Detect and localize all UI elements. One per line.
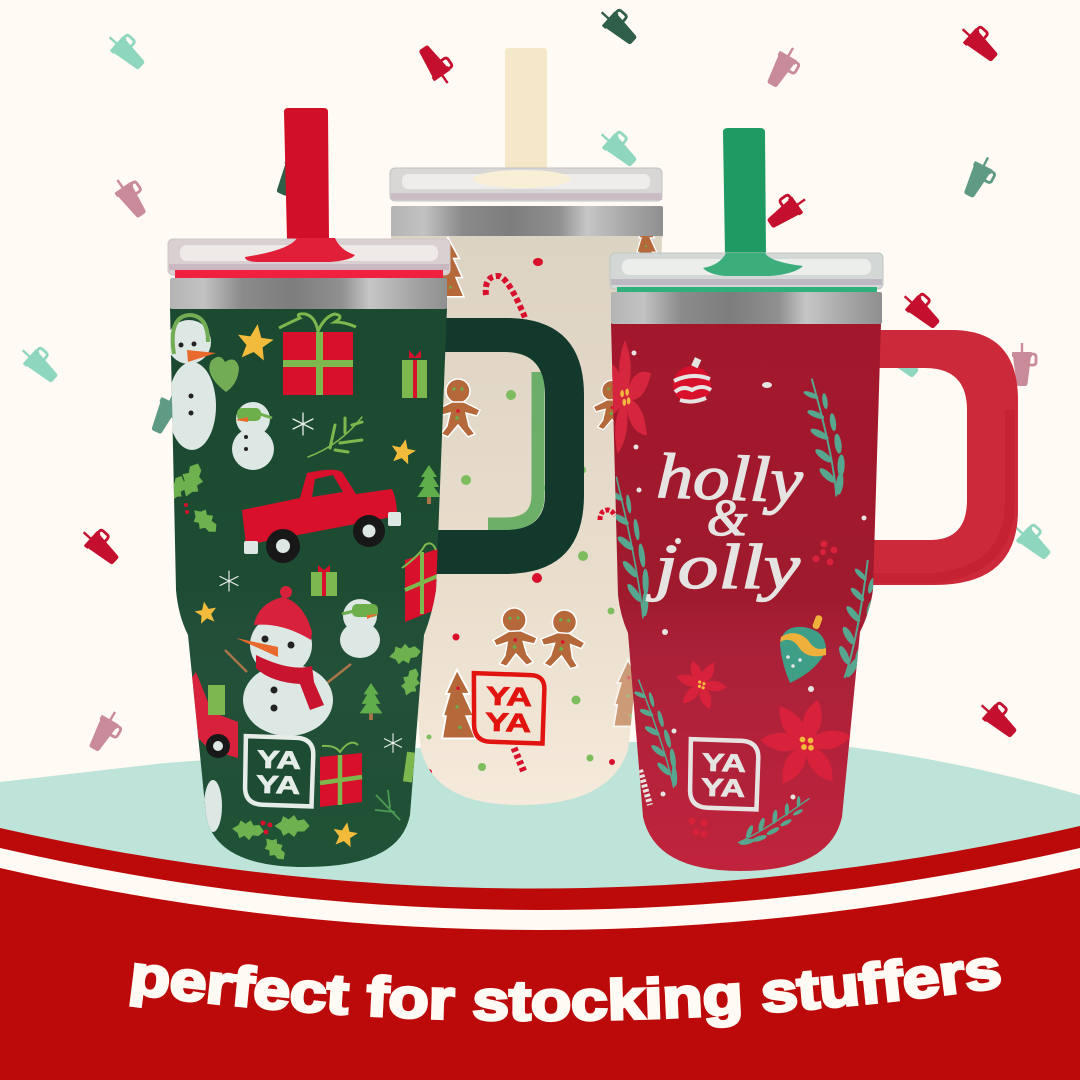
lower berries [688,818,708,838]
green YAYA logo [244,736,314,806]
large red gift [279,314,356,395]
big snowman with hat [225,586,351,736]
tumbler: green snowman [165,108,450,867]
green steel collar [170,278,447,309]
green YAYA logo: YA [257,746,302,775]
dark green handle [435,318,584,574]
holly & jolly script: jolly [646,531,801,602]
cream tumbler decals [426,222,658,775]
holly berries [812,540,838,566]
red steel collar [611,292,882,324]
small green gift [402,350,427,398]
cream steel collar [391,206,663,237]
green ornament [780,614,826,683]
cream YAYA logo [472,673,545,744]
snowman and christmas decals [165,314,441,865]
red handle [870,330,1018,585]
large poinsettia top [612,340,651,454]
green YAYA logo: YA [256,771,301,800]
red curved band with cream stripe [0,826,1080,1080]
curved caption: perfect for stocking stuffers [129,957,1002,1028]
goggle snowman small [340,599,380,658]
red YAYA logo: YA [702,749,747,778]
red YAYA logo [689,739,759,809]
scattered mini tumbler icons [16,2,1057,756]
earmuff snowman [167,315,239,450]
pine twig [308,417,362,457]
striped ornament [673,357,711,404]
cream straw [505,48,547,172]
green straw [723,128,766,255]
red pickup truck [242,470,401,563]
red YAYA logo: YA [701,774,746,803]
side gift [402,543,440,622]
tumbler: red holly and jolly [596,128,1018,871]
goggle snowman [232,402,274,470]
gift by logo [320,743,362,807]
truck wrap left [190,672,238,758]
cream body [391,236,662,805]
red tumbler lid [610,253,883,293]
cream YAYA logo: YA [485,707,532,738]
mint table surface [0,742,1080,920]
red tumbler body [611,323,881,871]
tumbler: cream gingerbread [390,48,663,805]
red straw [284,108,329,240]
cream lid [390,168,662,201]
yellow star [238,324,274,360]
green tumbler lid [168,238,450,278]
small gift [311,565,337,596]
holly & jolly script [646,440,805,602]
cream YAYA logo: YA [486,681,533,712]
holly & jolly script: & [707,490,748,547]
green tumbler body [170,307,447,867]
holly & jolly script: holly [656,440,805,516]
large poinsettia bottom [760,700,850,784]
holly decals [612,340,874,845]
small poinsettia [676,660,727,710]
